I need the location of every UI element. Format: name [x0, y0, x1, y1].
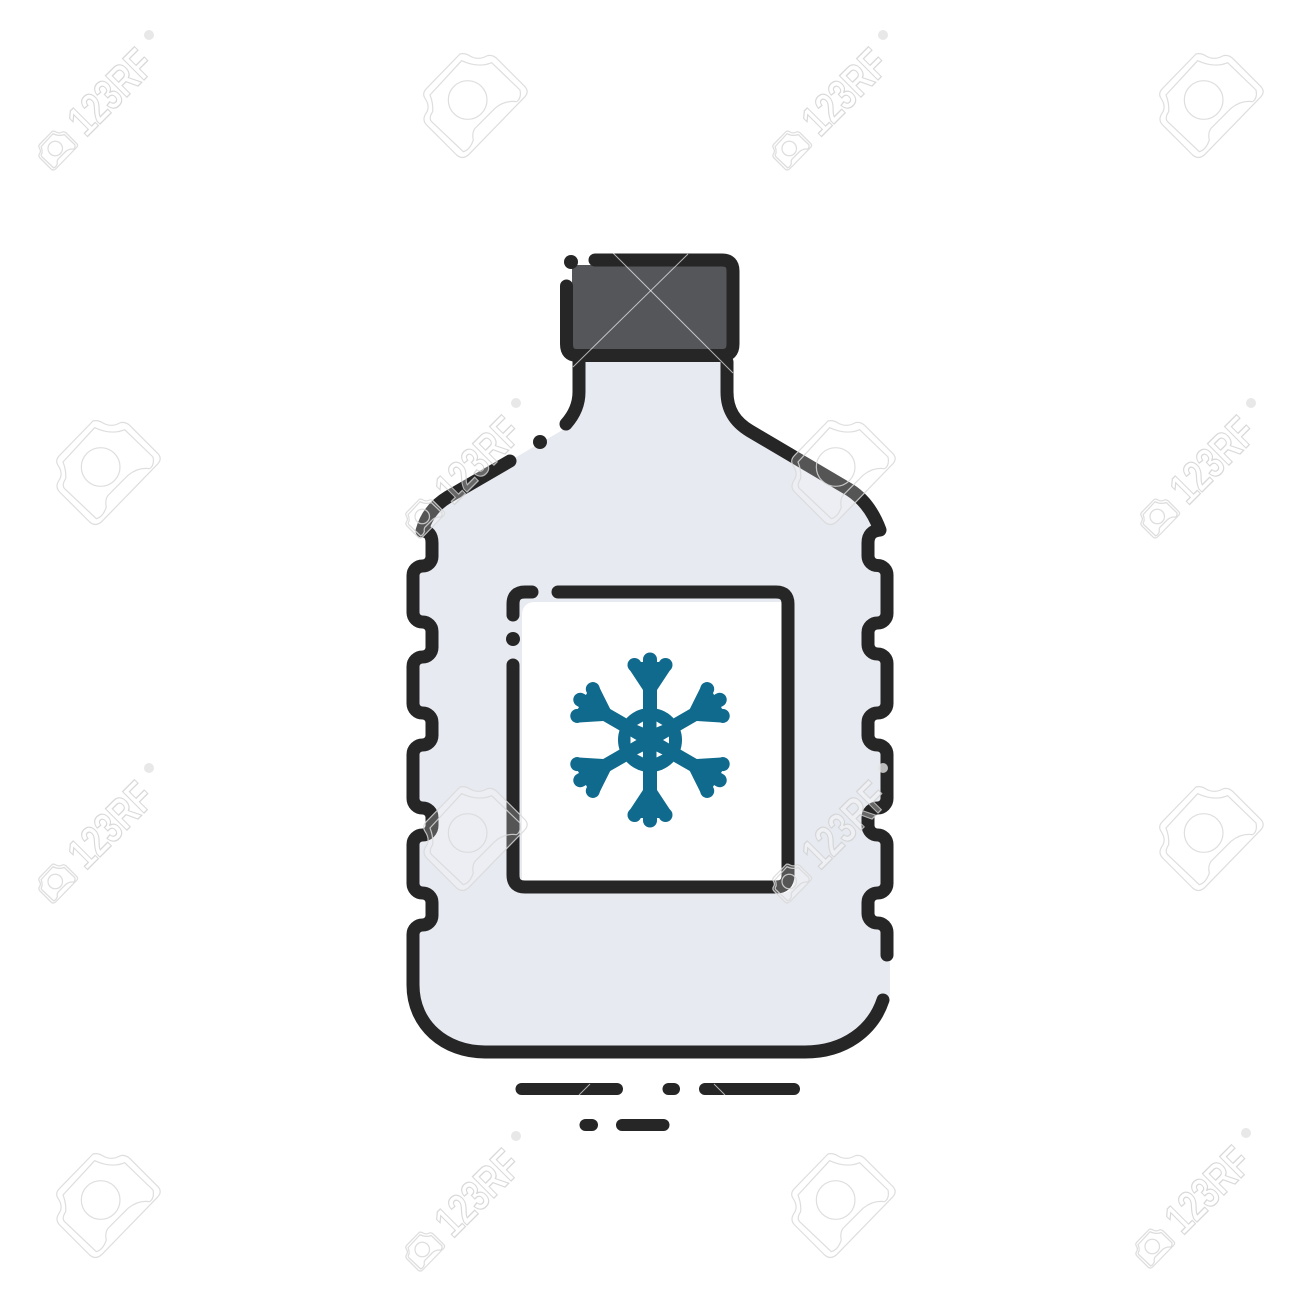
label panel	[506, 592, 794, 893]
watermark: 123RF upper right	[1141, 398, 1266, 538]
watermark: 123RF bottom right: 123RF	[1155, 1138, 1261, 1243]
watermark: 123RF top centre	[773, 30, 898, 170]
watermark: 123RF lower left: 123RF	[58, 773, 164, 878]
bottle outline	[413, 362, 887, 1052]
shoulder dot	[533, 435, 547, 449]
watermark: 123RF top left: 123RF	[58, 40, 164, 145]
right side with grips	[727, 362, 887, 955]
watermark: 123RF lower left	[39, 763, 164, 903]
watermark: 123RF bottom middle	[406, 1131, 531, 1271]
label outline	[513, 592, 788, 887]
watermark: 123RF bottom middle: 123RF	[425, 1141, 531, 1246]
cap fill	[572, 265, 727, 350]
watermark: 123RF upper middle	[406, 398, 531, 538]
bottle body fill	[413, 362, 890, 1052]
watermark crossing lines	[573, 252, 733, 1095]
watermark: 123RF top left	[39, 30, 164, 170]
label dot	[506, 632, 520, 646]
watermark: 123RF top centre: 123RF	[792, 40, 898, 145]
neck left	[566, 362, 579, 424]
bottle cap	[564, 255, 733, 356]
watermark: 123RF upper right: 123RF	[1160, 408, 1266, 513]
left side with grips	[413, 461, 883, 1052]
watermark: 123RF upper middle: 123RF	[425, 408, 531, 513]
cap dot	[564, 255, 578, 269]
watermark: 123RF lower centre: 123RF	[792, 773, 898, 878]
watermark: 123RF bottom right	[1136, 1128, 1261, 1268]
watermark: 123RF lower centre	[773, 763, 898, 903]
cap outline	[566, 260, 733, 356]
label fill	[522, 602, 794, 893]
icon: snowflake	[563, 652, 737, 828]
ground dashes	[522, 1089, 794, 1125]
